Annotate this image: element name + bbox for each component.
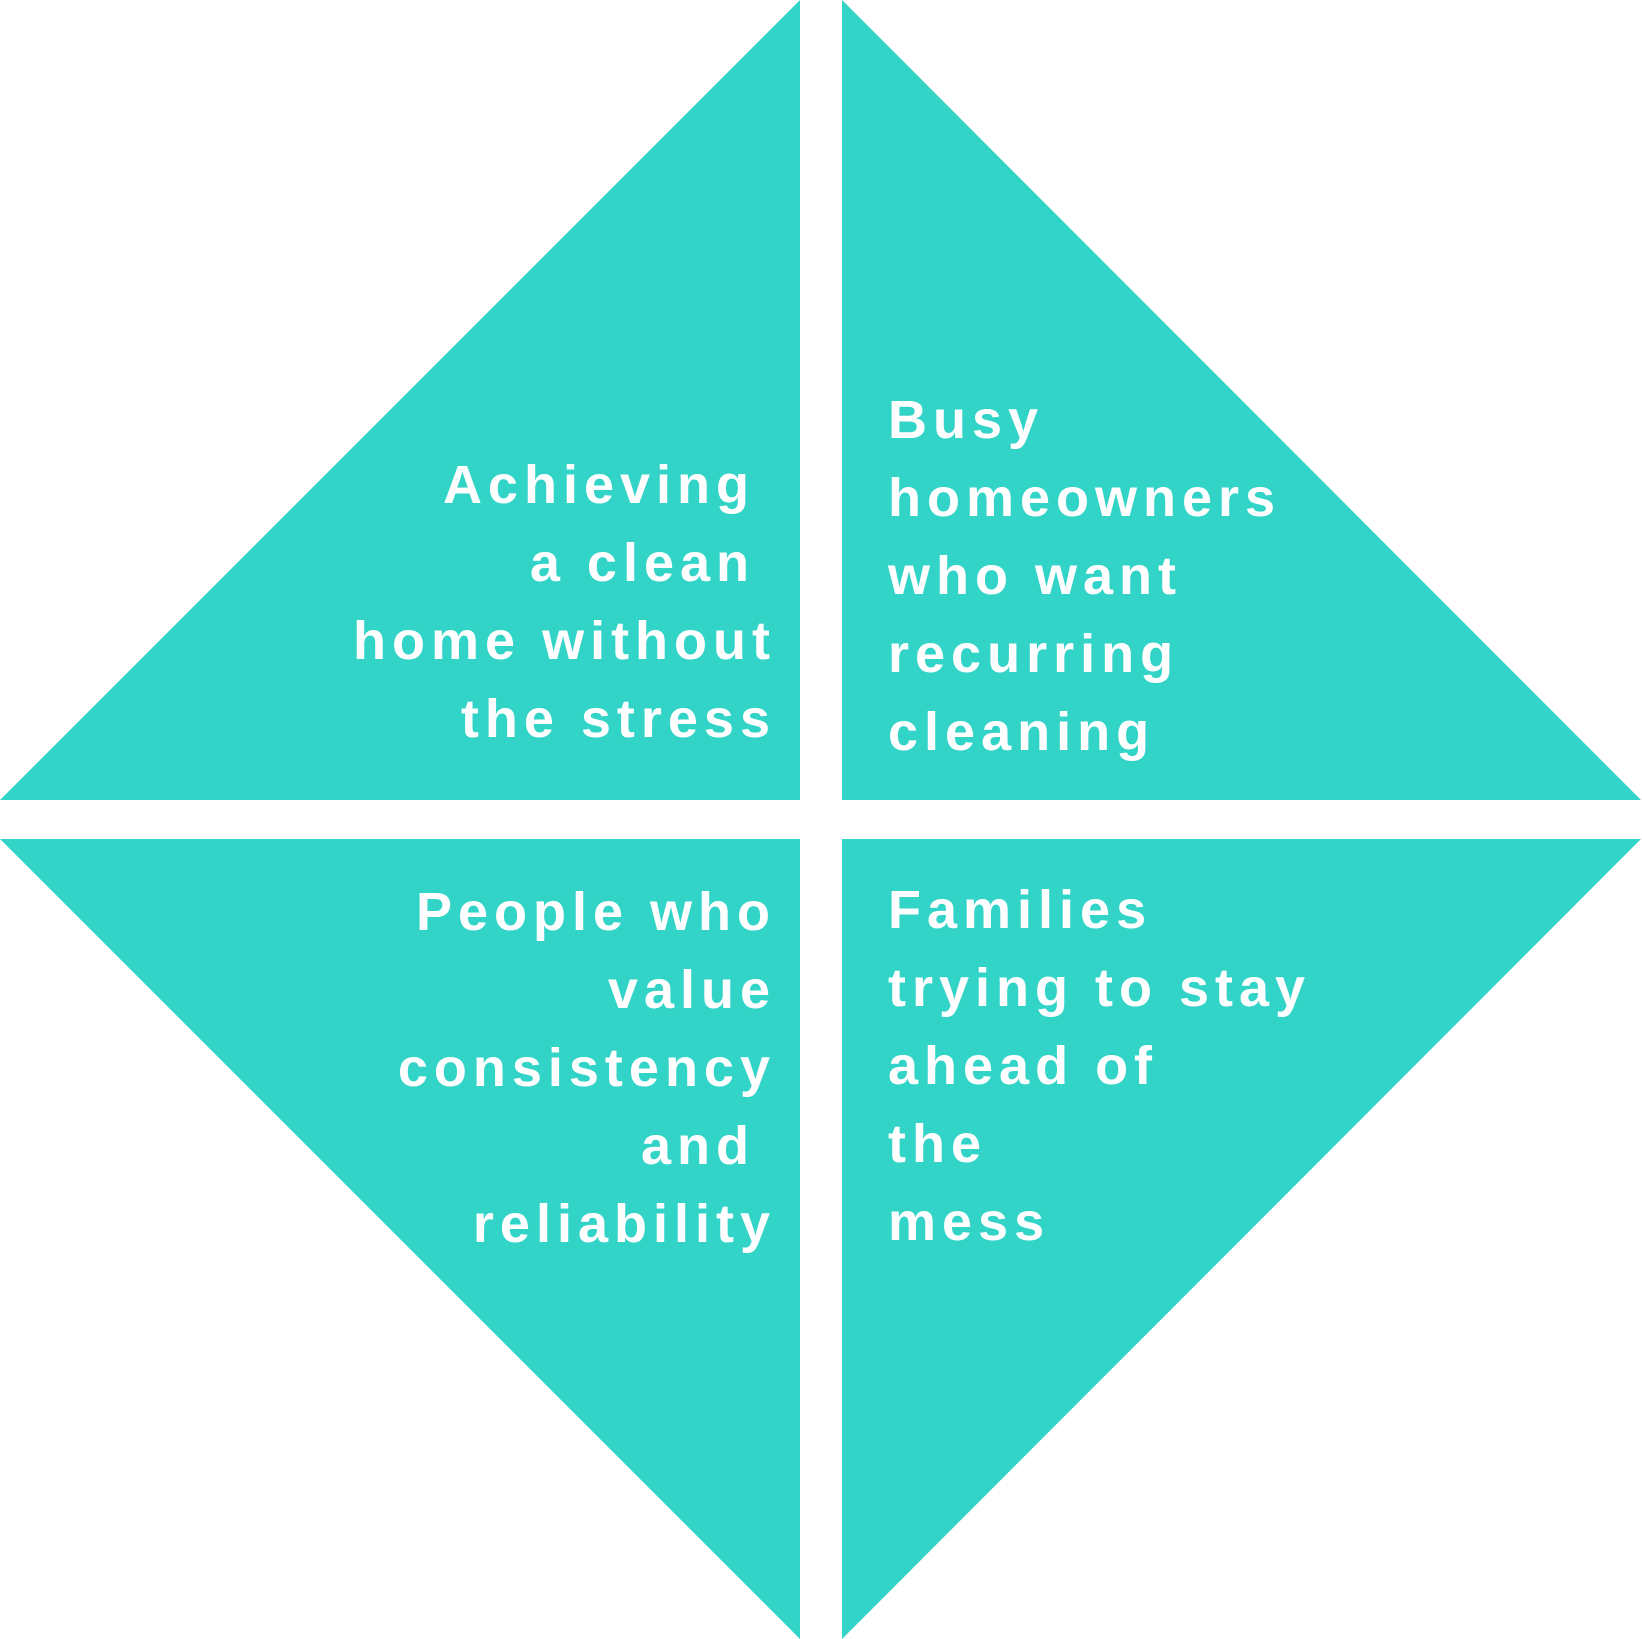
triangle: bottom-right bbox=[842, 839, 1641, 1639]
triangle: bottom-left bbox=[0, 839, 800, 1639]
text: top-left: Achieving a clean home without the stress bbox=[353, 455, 776, 749]
triangle: top-right bbox=[842, 0, 1641, 800]
text: bottom-right: Families trying to stay ahead of the mess bbox=[888, 880, 1311, 1252]
text: top-right: Busy homeowners who want recurring cleaning bbox=[888, 390, 1281, 762]
text: bottom-left: People who value consistency and reliability bbox=[398, 882, 776, 1254]
triangle: top-left bbox=[0, 0, 800, 800]
